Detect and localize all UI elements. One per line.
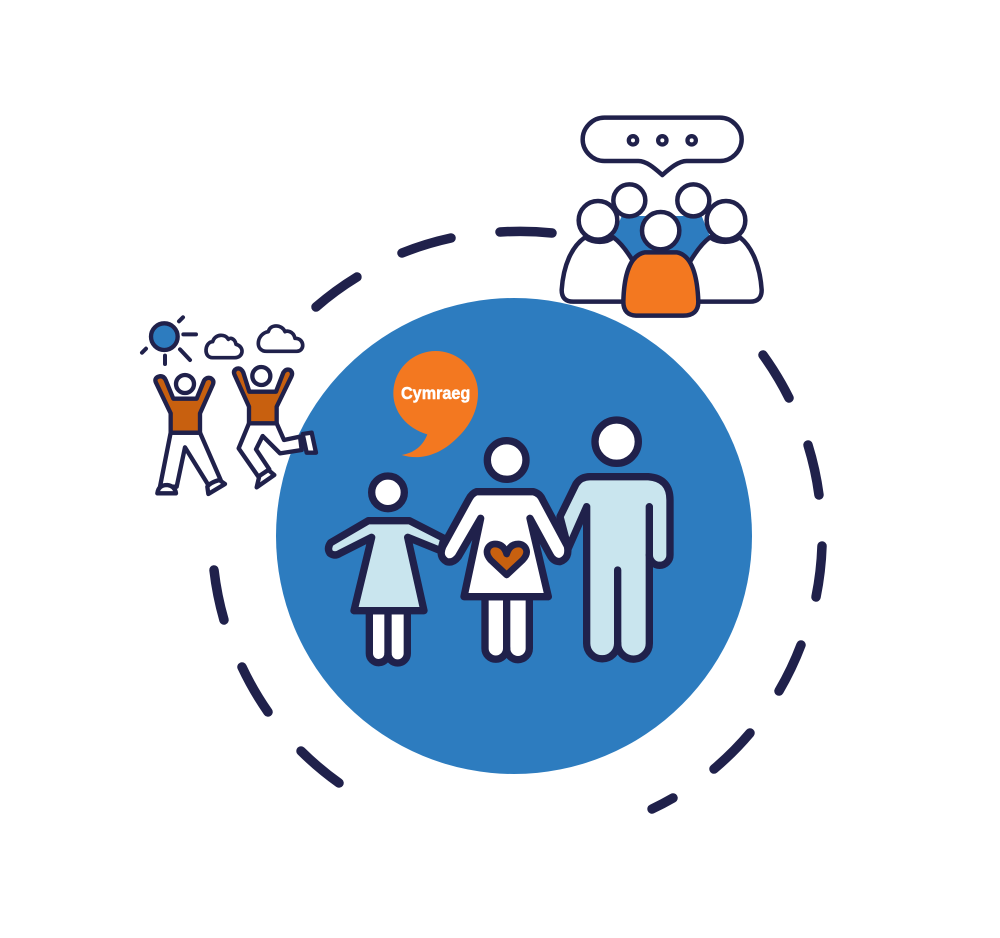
icon: sun xyxy=(142,317,196,364)
family group with speech bubble xyxy=(328,351,670,663)
central blue circle xyxy=(276,298,752,774)
speech bubble: Cymraeg: Cymraeg xyxy=(401,383,470,403)
jumping person, left xyxy=(155,375,225,494)
back row blue bodies xyxy=(613,216,710,262)
child figure xyxy=(328,476,444,663)
icon: group of people talking xyxy=(562,118,762,316)
icon: large cloud xyxy=(258,326,303,351)
icon: children playing outdoors xyxy=(142,317,316,494)
icon: heart xyxy=(487,544,527,575)
left white body xyxy=(562,237,633,302)
mother figure, pregnant xyxy=(441,441,568,660)
middle row heads xyxy=(579,201,745,240)
front orange person xyxy=(623,212,698,316)
right white body xyxy=(690,237,762,302)
speech bubble with three dots xyxy=(583,118,742,175)
back row heads xyxy=(613,184,709,216)
father figure xyxy=(560,420,670,659)
jumping person, right xyxy=(234,367,316,487)
dashed circular path xyxy=(214,231,822,809)
speech bubble: Cymraeg xyxy=(393,351,478,457)
icon: small cloud xyxy=(206,335,242,358)
